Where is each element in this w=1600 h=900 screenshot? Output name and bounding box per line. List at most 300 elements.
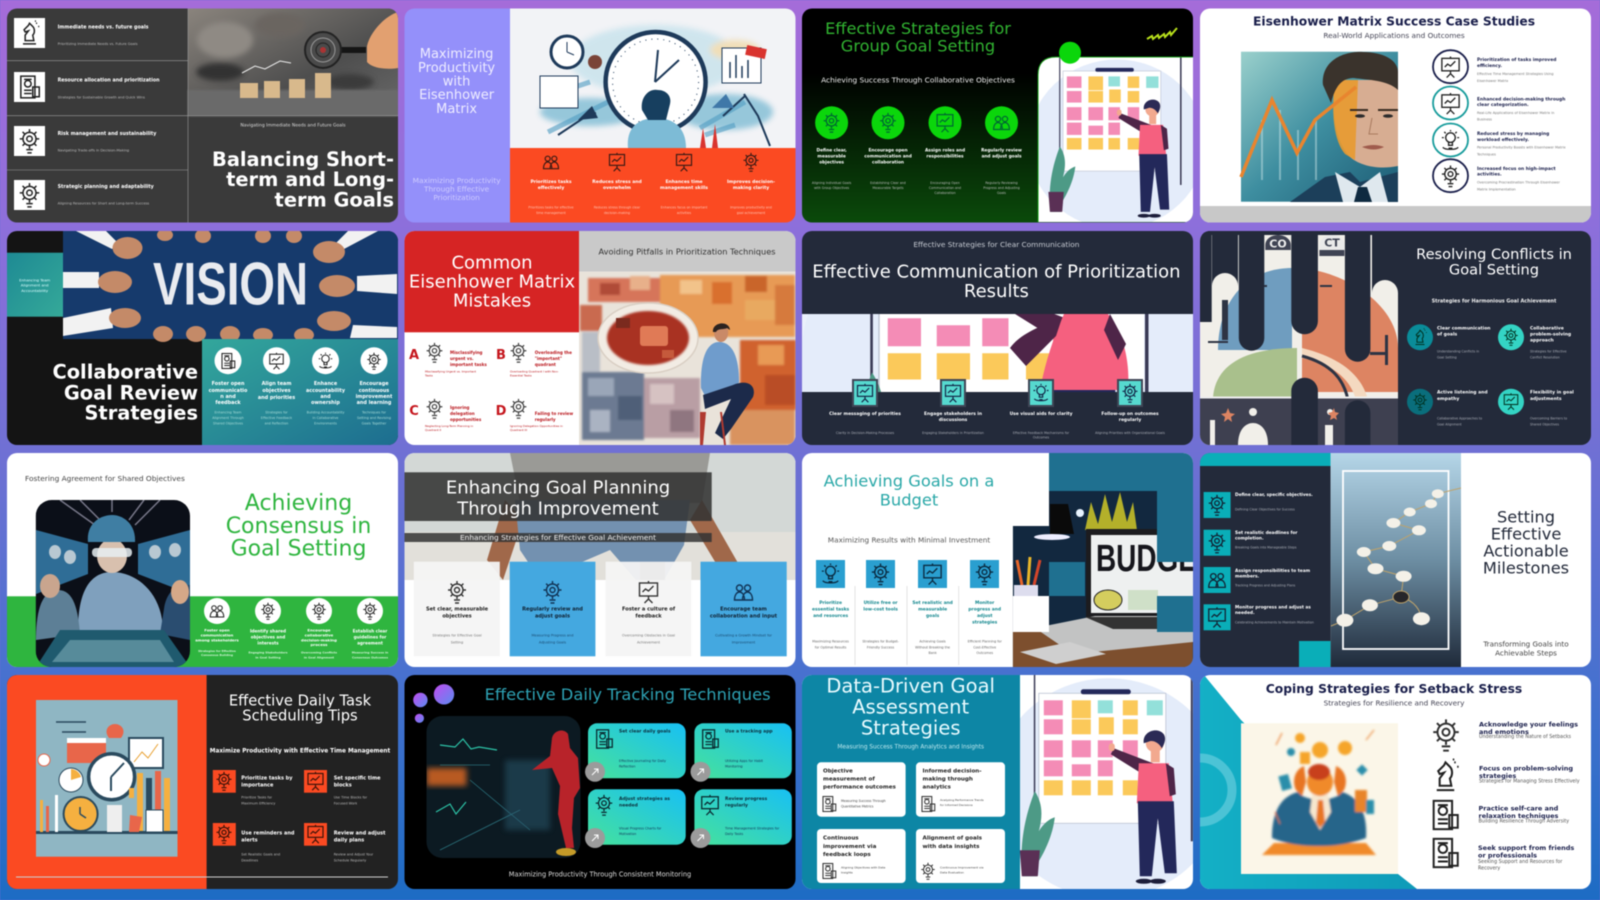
abstract conflict illustration	[1200, 231, 1398, 445]
card: tracking app	[690, 723, 792, 782]
strategy: active listening: empathy	[1437, 396, 1459, 402]
panel: communication of prioritization results	[800, 162, 1203, 560]
strategy: flexibility: Overcoming Barriers to	[1530, 417, 1567, 421]
subtitle: Strategies for Resilience and Recovery	[1324, 698, 1465, 708]
photo: laptop showing budget: BUDGET	[1096, 538, 1214, 580]
step: deadlines	[1204, 530, 1298, 556]
benefit: stress: decision-making	[604, 211, 630, 215]
item: accountability: Environments	[314, 421, 337, 425]
tip: acknowledge feelings: Acknowledge your feelings	[1479, 720, 1578, 728]
panel: daily tracking techniques	[404, 675, 796, 889]
strategy: flexibility: Shared Objectives	[1530, 422, 1559, 426]
title: Assessment	[852, 695, 970, 718]
benefit: stress: Reduces stress through clear	[594, 206, 641, 210]
step: monitor: needed.	[1235, 610, 1255, 616]
illustration: clock and worker	[540, 25, 773, 148]
tip: prioritize: Maximum Efficiency	[241, 802, 275, 806]
case: focus: Increased focus on high-impact	[1477, 166, 1557, 172]
panel: coping strategies	[1168, 675, 1591, 889]
step: deadlines: completion.	[1235, 535, 1264, 541]
item: review goals: Goals	[997, 191, 1006, 195]
tip: problem solving: Focus on problem-solving	[1479, 765, 1573, 773]
mistake B: B	[496, 348, 506, 363]
tip: monitor progress	[968, 560, 1002, 655]
benefit: prioritize: Prioritizes tasks for effective	[528, 206, 574, 210]
card: adjust strategies: needed	[619, 802, 638, 808]
step: clear messaging	[829, 380, 901, 435]
item: align: Align team	[262, 381, 291, 387]
mistake C: opportunities	[450, 416, 482, 422]
benefit: time management	[660, 153, 708, 215]
card: collaboration: Encourage team	[720, 607, 767, 613]
step: monitor	[1204, 604, 1314, 630]
green frame line	[1038, 57, 1193, 222]
card: clear objectives: Strategies for Effective Goal	[432, 634, 482, 638]
card: tracking app: Utilizing Apps for Habit	[725, 759, 764, 763]
left column dividers	[7, 8, 398, 222]
mistake B: quadrant	[535, 362, 556, 366]
item: assign roles: Assign roles and	[925, 147, 965, 153]
item: review goals: Progress and Adjusting	[983, 186, 1020, 190]
teal corner shape	[1200, 675, 1417, 889]
tip: reminders: alerts	[241, 837, 258, 843]
item: open communication: Measurable Targets	[872, 186, 904, 190]
item: clear guidelines	[352, 598, 388, 659]
card: feedback culture: Overcoming Obstacles in Goal	[622, 634, 675, 638]
column dividers	[855, 586, 959, 665]
item: collaborative decision making: process	[311, 642, 328, 646]
card: collaboration: Cultivating a Growth Mindset for	[715, 634, 772, 638]
subtitle: Effective Strategies for Clear Communication	[913, 240, 1080, 249]
item: improvement: Setting and Revising	[357, 416, 391, 420]
panel: goals on a budget	[802, 453, 1214, 667]
mistake A: urgent vs.	[450, 356, 474, 360]
step: deadlines: Set realistic deadlines for	[1235, 530, 1298, 536]
mistake D: Ignoring Delegation Opportunities in	[510, 424, 563, 428]
tip: time blocks: Focused Work	[334, 802, 357, 806]
benefit: prioritize: Prioritizes tasks	[530, 178, 572, 184]
tip: seek support: Seeking Support and Resources for	[1478, 858, 1562, 864]
photo: runner with data overlays	[426, 716, 580, 858]
item: strategic planning: Aligning Resources for Short and Long-term Success	[58, 202, 149, 206]
card: informed decisions: for Informed Decisions	[940, 803, 973, 807]
strategy: collaborative problem solving: Strategies for Effective	[1530, 350, 1567, 354]
strategy: collaborative problem solving: Conflict Resolution	[1530, 355, 1560, 359]
card: objective measurement: measurement of	[823, 776, 875, 782]
tip: time blocks: Use Time Blocks for	[334, 796, 368, 800]
benefit: decision making: goal achievement	[737, 211, 766, 215]
case: decision making: Enhanced decision-making through	[1477, 96, 1565, 102]
card: review goals: Measuring Progress and	[532, 634, 573, 638]
card: informed decisions: Analyzing Performance Trends	[940, 798, 984, 802]
decorative purple dots	[413, 684, 454, 723]
case: stress	[1433, 124, 1566, 157]
title: Budget	[880, 490, 938, 509]
item: align	[258, 347, 295, 425]
subtitle: Transforming Goals into	[1482, 639, 1569, 648]
item: identify shared objectives: Engaging Stakeholders	[248, 650, 288, 654]
item: foster open communication: Consensus Building	[201, 653, 233, 657]
item: improvement: improvement	[356, 394, 393, 400]
case: prioritization: Prioritization of tasks improved	[1477, 56, 1556, 62]
case: stress: Reduced stress by managing	[1477, 130, 1549, 136]
item: resource allocation: Strategies for Sustainable Growth and Quick Wins	[58, 96, 145, 100]
step: engage stakeholders: Engaging Stakeholders in Prioritization	[922, 431, 984, 435]
step: engage stakeholders	[922, 380, 984, 435]
strategy: collaborative problem solving: approach	[1530, 337, 1554, 343]
tip: problem solving	[1437, 759, 1580, 790]
item: identify shared objectives: interests	[257, 640, 279, 645]
case: prioritization: Eisenhower Matrix	[1477, 79, 1508, 83]
case: stress: Techniques	[1476, 153, 1496, 157]
subtitle: Measuring Success Through Analytics and Insights	[837, 744, 984, 750]
item: assign roles: Communication and	[929, 186, 961, 190]
item: clear guidelines: agreement	[357, 640, 383, 645]
step: responsibilities: Assign responsibilities to team	[1235, 568, 1311, 574]
panel: daily task scheduling	[7, 675, 398, 889]
tip: realistic goals: goals	[926, 612, 940, 618]
tip: time blocks: blocks	[334, 782, 352, 788]
photo: vision table with fists: VISION	[153, 250, 308, 318]
title: Collaborative	[52, 360, 198, 383]
item: improvement: Encourage	[359, 381, 389, 387]
mistake C: Ignoring	[450, 404, 470, 410]
panel: actionable milestones	[1200, 453, 1591, 667]
card: review progress: Time Management Strategies for	[724, 826, 780, 830]
tip: acknowledge feelings	[1433, 719, 1578, 751]
card: review progress	[690, 789, 792, 848]
tag box	[7, 253, 63, 317]
tip: daily plans: Review and adjust	[334, 831, 386, 837]
tip: time blocks	[304, 770, 381, 806]
item: collaborative decision making	[301, 598, 337, 659]
item: review goals: Regularly Reviewing	[985, 181, 1018, 185]
card: continuous improvement: feedback loops	[823, 852, 871, 858]
mistake A: Misclassifying Urgent vs. Important	[425, 370, 477, 374]
mistake B	[496, 343, 572, 378]
title: Actionable	[1483, 541, 1569, 560]
strategy: clear communication	[1407, 324, 1490, 359]
item: immediate needs: Immediate needs vs. future goals	[58, 24, 149, 30]
case: decision making	[1433, 86, 1565, 122]
tip: self-care: Practice self-care and	[1478, 804, 1559, 812]
mistake C	[409, 399, 482, 432]
tip: realistic goals: Bank	[928, 651, 937, 655]
item: open communication: collaboration	[872, 159, 904, 165]
step: monitor: Celebrating Achievements to Maintain Motivation	[1235, 620, 1314, 624]
card: feedback culture: Achievement	[637, 640, 661, 644]
item: clear guidelines: Consensus Outcomes	[352, 655, 388, 659]
case: prioritization	[1433, 50, 1556, 83]
strategy: active listening	[1407, 389, 1488, 426]
step: responsibilities: members.	[1235, 573, 1260, 579]
title: Effective Communication of Prioritization	[812, 261, 1181, 282]
item: improvement: Techniques for	[361, 411, 387, 415]
step: responsibilities: Tracking Progress and Adjusting Plans	[1234, 584, 1296, 588]
card: continuous improvement: Insights	[841, 870, 853, 874]
card: tracking app: Use a tracking app	[725, 728, 773, 734]
tip: reminders: Use reminders and	[241, 831, 295, 837]
item: collaborative decision making: in Goal Alignment	[304, 655, 335, 659]
card: adjust strategies: Motivation	[619, 832, 636, 836]
tag box: Enhancing Team	[19, 277, 51, 282]
title: Productivity	[418, 60, 495, 76]
tip: reminders	[213, 823, 295, 863]
tag box: Alignment and	[21, 282, 49, 287]
tip: reminders: Set Realistic Goals and	[241, 852, 280, 856]
panel: achieving consensus	[7, 453, 398, 667]
tip: realistic goals: measurable	[918, 606, 947, 612]
mistake A: A	[409, 348, 419, 363]
tip: self-care: relaxation techniques	[1478, 812, 1559, 820]
tip: monitor progress: progress and	[968, 606, 1001, 612]
tip: free tools: Friendly Success	[867, 645, 895, 649]
item: resource allocation	[14, 72, 160, 102]
strategy: active listening: Collaborative Approaches to	[1437, 417, 1482, 421]
card: review goals	[510, 562, 595, 656]
card: alignment: with data insights	[922, 844, 980, 850]
item: review goals	[981, 106, 1022, 195]
photo: person in push-up position	[404, 453, 796, 580]
item: assign roles: responsibilities	[926, 153, 964, 159]
card: adjust strategies: Visual Progress Charts for	[619, 826, 662, 830]
case: focus: Overcoming Procrastination Through Eisenhower	[1477, 180, 1561, 184]
step: clear messaging: Clarity in Decision-Making Processes	[836, 431, 894, 435]
tip: realistic goals: Without Breaking the	[915, 645, 950, 649]
illustration: sticky note board	[1038, 56, 1194, 223]
item: accountability: and	[320, 394, 331, 400]
title: Coping Strategies for Setback Stress	[1266, 682, 1522, 696]
benefit: stress	[592, 153, 642, 215]
mistake D: Failing to review	[535, 410, 573, 416]
card: clear objectives: objectives	[442, 614, 472, 620]
title: Consensus in	[226, 514, 371, 538]
item: accountability: Building Accountability	[307, 411, 344, 415]
tip: prioritize: Prioritize tasks by	[241, 776, 293, 782]
title: Eisenhower	[419, 88, 495, 102]
card: continuous improvement: improvement via	[823, 844, 877, 850]
item: clear guidelines: Establish clear	[353, 628, 388, 633]
panel: balancing short-term and long-term goals	[7, 8, 398, 222]
case: decision making: Real-Life Applications of Eisenhower Matrix in	[1477, 111, 1554, 115]
title: Goal Setting	[1449, 261, 1539, 278]
panel: eisenhower matrix mistakes	[404, 231, 796, 446]
card: clear objectives: Set clear, measurable	[426, 607, 489, 613]
tip: daily plans: daily plans	[334, 837, 364, 843]
tip: seek support	[1434, 839, 1574, 871]
tip: prioritize: Prioritize	[819, 600, 842, 606]
benefit: prioritize	[528, 156, 574, 215]
item: open communication	[864, 106, 912, 190]
tag box: Accountability	[21, 288, 49, 292]
item: feedback: Shared Objectives	[213, 421, 243, 425]
step: visual aids: Effective Feedback Mechanisms for	[1013, 431, 1070, 435]
tip: monitor progress: Efficient Planning for	[968, 639, 1002, 643]
item: open communication: Establishing Clear and	[870, 181, 906, 185]
tip: prioritize	[812, 560, 850, 649]
subtitle: Maximize Productivity with Effective Time Management	[210, 748, 391, 754]
case: prioritization: Effective Time Management Strategies Using	[1477, 72, 1554, 76]
benefit: time management: Enhances time	[665, 178, 703, 184]
case: focus: Matrix Implementation	[1477, 187, 1516, 191]
item: identify shared objectives: Identify shared	[250, 628, 286, 633]
step: visual aids: Outcomes	[1033, 436, 1049, 440]
card: clear objectives: Setting	[451, 640, 463, 644]
item: foster open communication: communication	[201, 632, 234, 637]
card: review goals: Adjusting Goals	[539, 640, 566, 644]
tip: reminders: Deadlines	[241, 859, 258, 863]
mistake B: Overloading the	[535, 350, 572, 354]
subtitle: Through Effective	[423, 184, 490, 193]
photo: magnifier over wooden blocks	[188, 8, 398, 116]
case: decision making: clear categorization.	[1477, 102, 1529, 108]
title: Mistakes	[453, 290, 531, 311]
case: decision making: Business	[1477, 118, 1492, 122]
tip: seek support: or professionals	[1478, 852, 1537, 860]
item: define objectives: measurable	[817, 153, 846, 159]
step: objectives	[1204, 492, 1313, 518]
mistake C: C	[409, 404, 419, 419]
strategy: active listening: Goal Alignment	[1437, 422, 1462, 426]
illustration: stressed person	[1241, 723, 1398, 874]
card: adjust strategies: Adjust strategies as	[619, 796, 670, 802]
title: Maximizing	[420, 46, 493, 62]
footer caption: Maximizing Productivity Through Consistent Monitoring	[509, 870, 691, 878]
step: visual aids	[1010, 380, 1073, 440]
subtitle: Avoiding Pitfalls in Prioritization Techniques	[598, 247, 776, 257]
title: Strategies	[861, 716, 960, 739]
tip: seek support: Seek support from friends	[1478, 844, 1574, 852]
card: collaboration: Improvement	[732, 640, 756, 644]
case: focus	[1433, 159, 1561, 192]
mistake C: Neglecting Long-Term Planning in	[425, 424, 473, 428]
title: Achieving	[245, 490, 352, 516]
item: assign roles: Collaboration	[934, 191, 956, 195]
item: strategic planning	[14, 180, 155, 210]
item: accountability: accountability	[306, 388, 346, 394]
card: continuous improvement	[817, 829, 906, 883]
item: feedback: communicatio	[209, 388, 248, 394]
mistake B: Overloading Quadrant I with Non-	[510, 370, 559, 374]
step: engage stakeholders: discussions	[939, 416, 968, 422]
tip: prioritize: essential tasks	[812, 606, 850, 612]
card: feedback culture	[606, 562, 691, 656]
step: follow up: Aligning Priorities with Organizational Goals	[1095, 431, 1165, 435]
subtitle: Maximizing Productivity	[413, 176, 501, 184]
panel: enhancing goal planning	[404, 453, 796, 667]
title: Effective Daily Task	[229, 692, 372, 709]
step: responsibilities	[1204, 567, 1311, 593]
item: define objectives: Aligning Individual Goals	[812, 181, 852, 185]
card: review goals: adjust goals	[535, 614, 570, 620]
title: Effective Daily Tracking Techniques	[485, 685, 771, 704]
title: with	[443, 74, 470, 89]
step: monitor: Monitor progress and adjust as	[1235, 604, 1311, 610]
tip: daily plans: Review and Adjust Your	[334, 852, 374, 856]
item: align: objectives	[262, 388, 291, 394]
mistake D: D	[496, 404, 507, 419]
tip: free tools: Utilize free or	[864, 600, 898, 606]
strategies band	[202, 339, 398, 445]
card: tracking app: Monitoring	[725, 765, 743, 769]
benefit: prioritize: effectively	[538, 184, 564, 190]
benefit: decision making	[727, 153, 775, 215]
item: align: and Reflection	[265, 421, 288, 425]
card: objective measurement: Objective	[823, 768, 853, 774]
item: feedback	[209, 347, 248, 425]
item: immediate needs: Prioritizing Immediate Needs vs. Future Goals	[58, 42, 138, 46]
eyebrow: Fostering Agreement for Shared Objectives	[25, 474, 185, 483]
item: define objectives: Define clear,	[817, 147, 847, 153]
item: foster open communication: Strategies for Effective	[198, 649, 236, 653]
strategy: active listening: Active listening and	[1437, 389, 1488, 395]
card: collaboration: collaboration and input	[710, 614, 778, 620]
title: Milestones	[1483, 558, 1569, 577]
item: collaborative decision making: decision-making	[301, 637, 337, 642]
item: accountability	[306, 347, 346, 425]
panel: resolving conflicts	[1200, 231, 1591, 445]
item: feedback: Alignment Through	[212, 416, 244, 420]
divider line	[16, 876, 388, 878]
card: alignment: Alignment of goals	[922, 836, 983, 842]
green dot	[1059, 42, 1081, 64]
mistake B: Essential Tasks	[510, 374, 532, 378]
tip: problem solving: strategies	[1479, 772, 1516, 780]
tip: prioritize: Maximizing Resources	[812, 639, 849, 643]
photo: stepping stones path	[1331, 453, 1461, 667]
title band	[404, 472, 712, 521]
card: informed decisions: Informed decision-	[922, 768, 982, 774]
tip: free tools	[862, 560, 900, 649]
teal colour blocks	[1049, 453, 1193, 632]
mistake D: Quadrant III	[510, 428, 527, 432]
tip: prioritize: and resources	[813, 612, 848, 618]
title: Goal Setting	[231, 536, 366, 561]
item: identify shared objectives: in Goal Setting	[255, 655, 281, 659]
item: foster open communication: among stakeholders	[195, 637, 240, 642]
subtitle band	[404, 533, 712, 542]
strategy: flexibility: Flexibility in goal	[1530, 389, 1574, 395]
tip: prioritize: Prioritize Tasks for	[241, 796, 273, 800]
step: deadlines: Breaking Goals into Manageable Steps	[1235, 545, 1297, 549]
tip: realistic goals: Set realistic and	[912, 600, 953, 606]
card: daily goals: Reflection	[619, 765, 635, 769]
mistake A: Tasks	[424, 374, 433, 378]
benefit: stress: overwhelm	[603, 184, 631, 190]
tip: monitor progress: Outcomes	[976, 651, 993, 655]
title: Common	[451, 252, 533, 273]
card: continuous improvement: Aligning Objectives with Data	[841, 866, 886, 870]
card: feedback culture: feedback	[635, 614, 662, 620]
card: objective measurement	[817, 762, 906, 817]
strategy: collaborative problem solving: Collaborative	[1530, 325, 1564, 331]
tip: self-care	[1434, 801, 1569, 829]
mistake D	[496, 399, 573, 432]
photo: vision table with fists	[63, 229, 398, 342]
step: engage stakeholders: Engage stakeholders in	[924, 410, 982, 416]
card: objective measurement: Quantitative Metrics	[841, 805, 874, 809]
benefit: stress: Reduces stress and	[592, 178, 642, 184]
item: define objectives: objectives	[819, 159, 844, 165]
tip: daily plans	[304, 823, 386, 863]
item: immediate needs	[14, 18, 149, 48]
tip: monitor progress: strategies	[972, 619, 998, 625]
subtitle: Achieving Success Through Collaborative Objectives	[821, 76, 1015, 84]
item: strategic planning: Strategic planning and adaptability	[58, 184, 155, 190]
card: daily goals: Effective Journaling for Daily	[619, 759, 666, 763]
abstract conflict illustration: CT	[1324, 236, 1340, 250]
photo: man with chart overlay	[1241, 52, 1398, 202]
